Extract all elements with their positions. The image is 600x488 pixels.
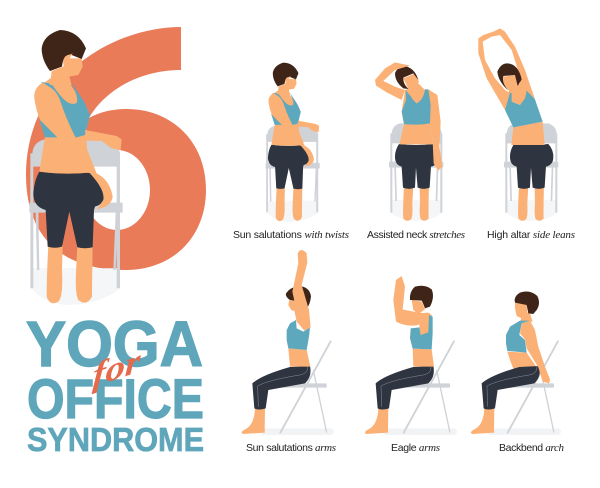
pose: assisted neck stretches [375,62,443,221]
title: yoga for office syndrome: for [91,341,143,395]
pose: high altar side leans [478,28,558,221]
label: sun salutations with twists: Sun salutations with twists [233,229,349,241]
big orange number 6 [26,27,206,270]
label: high altar side leans: High altar side leans [487,229,575,241]
title: yoga for office syndrome: OFFICE [27,367,204,430]
title: yoga for office syndrome [26,308,204,458]
label: eagle arms: Eagle arms [391,442,440,454]
title: yoga for office syndrome: YOGA [26,308,203,380]
label: assisted neck stretches: Assisted neck stretches [367,229,465,241]
label: sun salutations arms: Sun salutations arms [246,442,336,454]
pose: eagle arms [365,276,457,435]
pose: sun salutations arms [242,250,334,435]
title: yoga for office syndrome: SYNDROME [27,421,204,458]
label: backbend arch: Backbend arch [499,442,564,454]
pose: sun salutations with twists [266,63,320,222]
pose: backbend arch [471,292,561,435]
large seated twist figure [29,30,123,305]
